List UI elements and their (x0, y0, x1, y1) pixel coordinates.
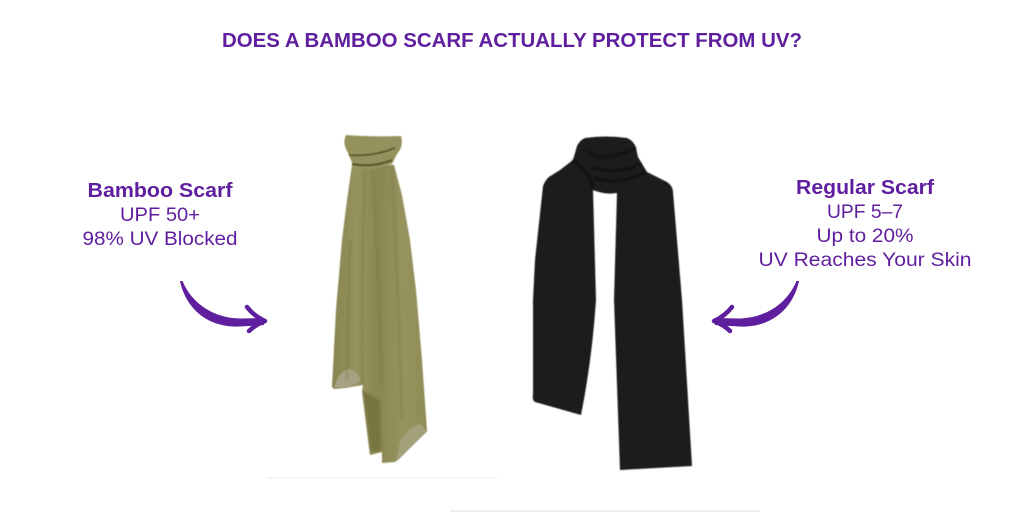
text block: regular scarf: Up to 20% (816, 225, 914, 247)
text block: bamboo scarf: Bamboo Scarf (88, 180, 233, 202)
text block: regular scarf: UV Reaches Your Skin (758, 249, 972, 271)
text block: regular scarf (758, 177, 972, 271)
arrow: toward bamboo scarf (180, 281, 265, 331)
regular scarf illustration (533, 136, 692, 470)
text block: bamboo scarf (82, 180, 238, 250)
arrow: toward regular scarf (714, 281, 799, 331)
text block: regular scarf: UPF 5–7 (827, 201, 903, 223)
text block: bamboo scarf: 98% UV Blocked (82, 228, 238, 250)
title: DOES A BAMBOO SCARF ACTUALLY PROTECT FROM UV? (222, 30, 802, 52)
bamboo scarf illustration (332, 135, 427, 463)
text block: bamboo scarf: UPF 50+ (120, 204, 200, 226)
text block: regular scarf: Regular Scarf (796, 177, 934, 199)
